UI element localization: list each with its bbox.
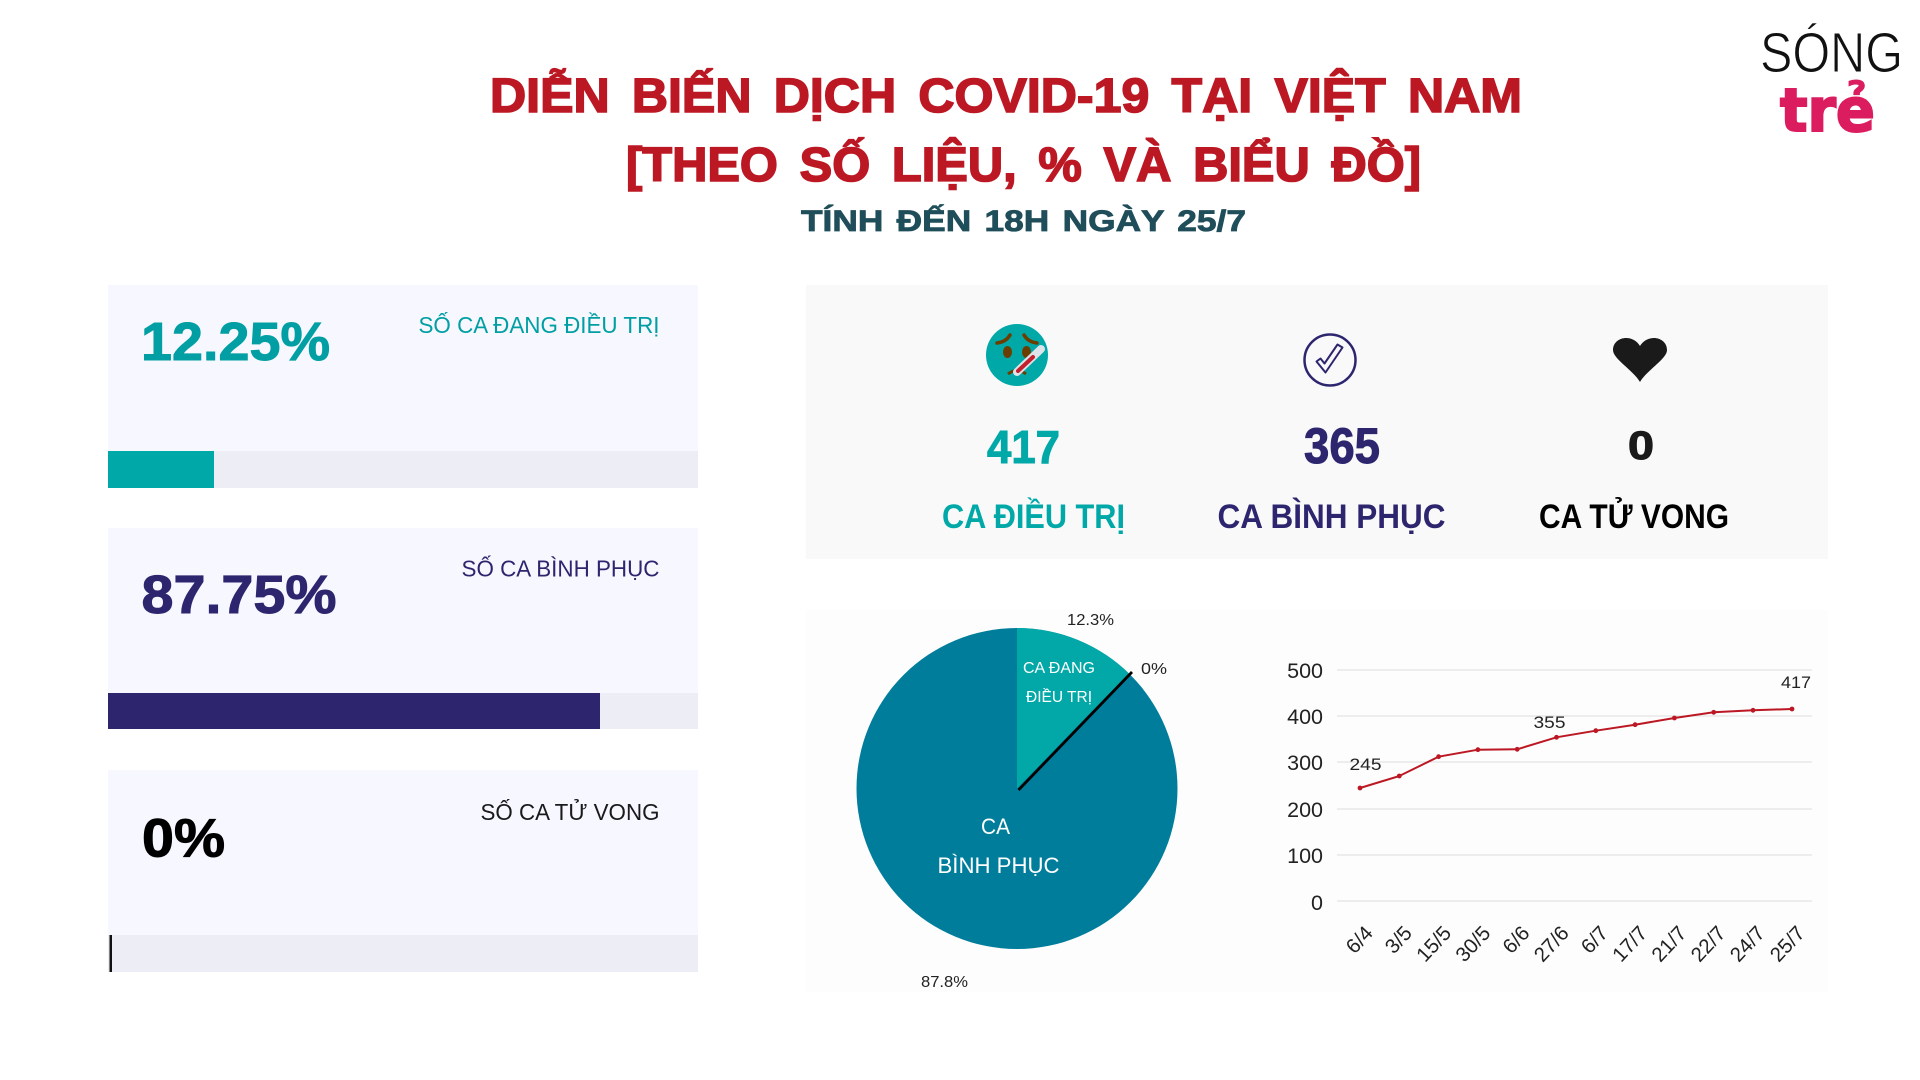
stat: 0 deaths: 0 (1628, 424, 1654, 468)
pie label: recovered: BÌNH PHỤC (938, 853, 1060, 878)
icon: heart (1613, 338, 1667, 382)
percentage: 0%: 0% (142, 808, 225, 868)
data line (1360, 709, 1792, 788)
header: title block (490, 68, 1522, 238)
card: deaths (108, 770, 698, 972)
pie label: recovered (938, 814, 1060, 878)
data markers (1358, 707, 1794, 790)
x axis labels: 30/5 (1451, 922, 1495, 967)
logo word: trẻ: trẻ (1780, 76, 1875, 146)
pie value: 87.8%: 87.8% (921, 974, 968, 991)
pie slice line: deaths 0% (1018, 672, 1132, 790)
stat: 365 recovered (1218, 418, 1446, 536)
subtitle: TÍNH ĐẾN 18H NGÀY 25/7 (801, 204, 1246, 238)
data label: 417: 417 (1781, 673, 1811, 692)
x axis labels: 27/6 (1530, 922, 1574, 967)
x axis labels: 6/4 (1341, 922, 1378, 958)
percentage: 12.25%: 12.25% (141, 312, 330, 372)
y axis labels: 300 (1287, 751, 1323, 775)
y axis labels: 0 (1311, 891, 1323, 915)
title line 2: [THEO SỐ LIỆU, % VÀ BIỂU ĐỒ] (626, 137, 1421, 192)
x axis labels: 15/5 (1412, 922, 1456, 967)
x axis labels: 25/7 (1766, 922, 1810, 967)
pie value: 0%: 0% (1141, 661, 1167, 678)
y axis labels (1287, 659, 1323, 915)
x axis labels: 6/6 (1498, 922, 1534, 958)
label: deaths: SỐ CA TỬ VONG (480, 797, 660, 825)
pie label: under treatment: ĐIỀU TRỊ (1026, 687, 1092, 706)
data label: 245: 245 (1350, 755, 1382, 774)
icon: check mark in circle (1304, 334, 1356, 386)
stat: 417 under treatment: 417 (987, 421, 1060, 473)
stat label: deaths: CA TỬ VONG (1539, 498, 1729, 536)
y axis labels: 400 (1287, 705, 1323, 729)
percentage: 87.75%: 87.75% (142, 565, 336, 625)
stat: 0 deaths (1539, 424, 1729, 536)
panel: percentage cards (108, 285, 698, 972)
pie label: under treatment (1023, 660, 1095, 706)
stat label: under treatment: CA ĐIỀU TRỊ (942, 498, 1125, 536)
pie label: recovered: CA (981, 814, 1010, 839)
progress bar: 0% (110, 935, 112, 972)
pie slice: under treatment (1017, 628, 1129, 788)
pie value: 12.3%: 12.3% (1067, 612, 1114, 629)
x axis labels: 24/7 (1726, 922, 1770, 967)
y axis labels: 500 (1287, 659, 1323, 683)
panel: case counts (806, 285, 1828, 559)
card: cases under treatment (108, 285, 698, 488)
y axis labels: 200 (1287, 798, 1323, 822)
x axis labels: 22/7 (1686, 922, 1730, 967)
stat label: recovered: CA BÌNH PHỤC (1218, 498, 1446, 536)
stat: 417 under treatment (942, 421, 1125, 536)
line chart (1287, 659, 1812, 967)
title line 1: DIỄN BIẾN DỊCH COVID-19 TẠI VIỆT NAM (490, 68, 1522, 123)
icon: sick face with thermometer (986, 324, 1048, 386)
label: recovered: SỐ CA BÌNH PHỤC (462, 554, 660, 582)
progress bar: 87.75% (108, 693, 600, 729)
progress bar: 12.25% (108, 451, 214, 488)
x axis labels: 3/5 (1381, 922, 1417, 958)
card: recovered cases (108, 528, 698, 729)
x axis labels: 17/7 (1608, 922, 1652, 967)
x axis labels (1341, 922, 1810, 967)
panel: charts background (806, 610, 1828, 992)
label: under treatment: SỐ CA ĐANG ĐIỀU TRỊ (418, 311, 660, 338)
pie chart (856, 612, 1178, 991)
y axis labels: 100 (1287, 844, 1323, 868)
logo: Sóng Trẻ (1760, 21, 1903, 146)
pie label: under treatment: CA ĐANG (1023, 660, 1095, 677)
data label: 355: 355 (1534, 713, 1566, 732)
stat: 365 recovered: 365 (1304, 418, 1380, 474)
x axis labels: 6/7 (1577, 922, 1613, 958)
x axis labels: 21/7 (1647, 922, 1691, 967)
